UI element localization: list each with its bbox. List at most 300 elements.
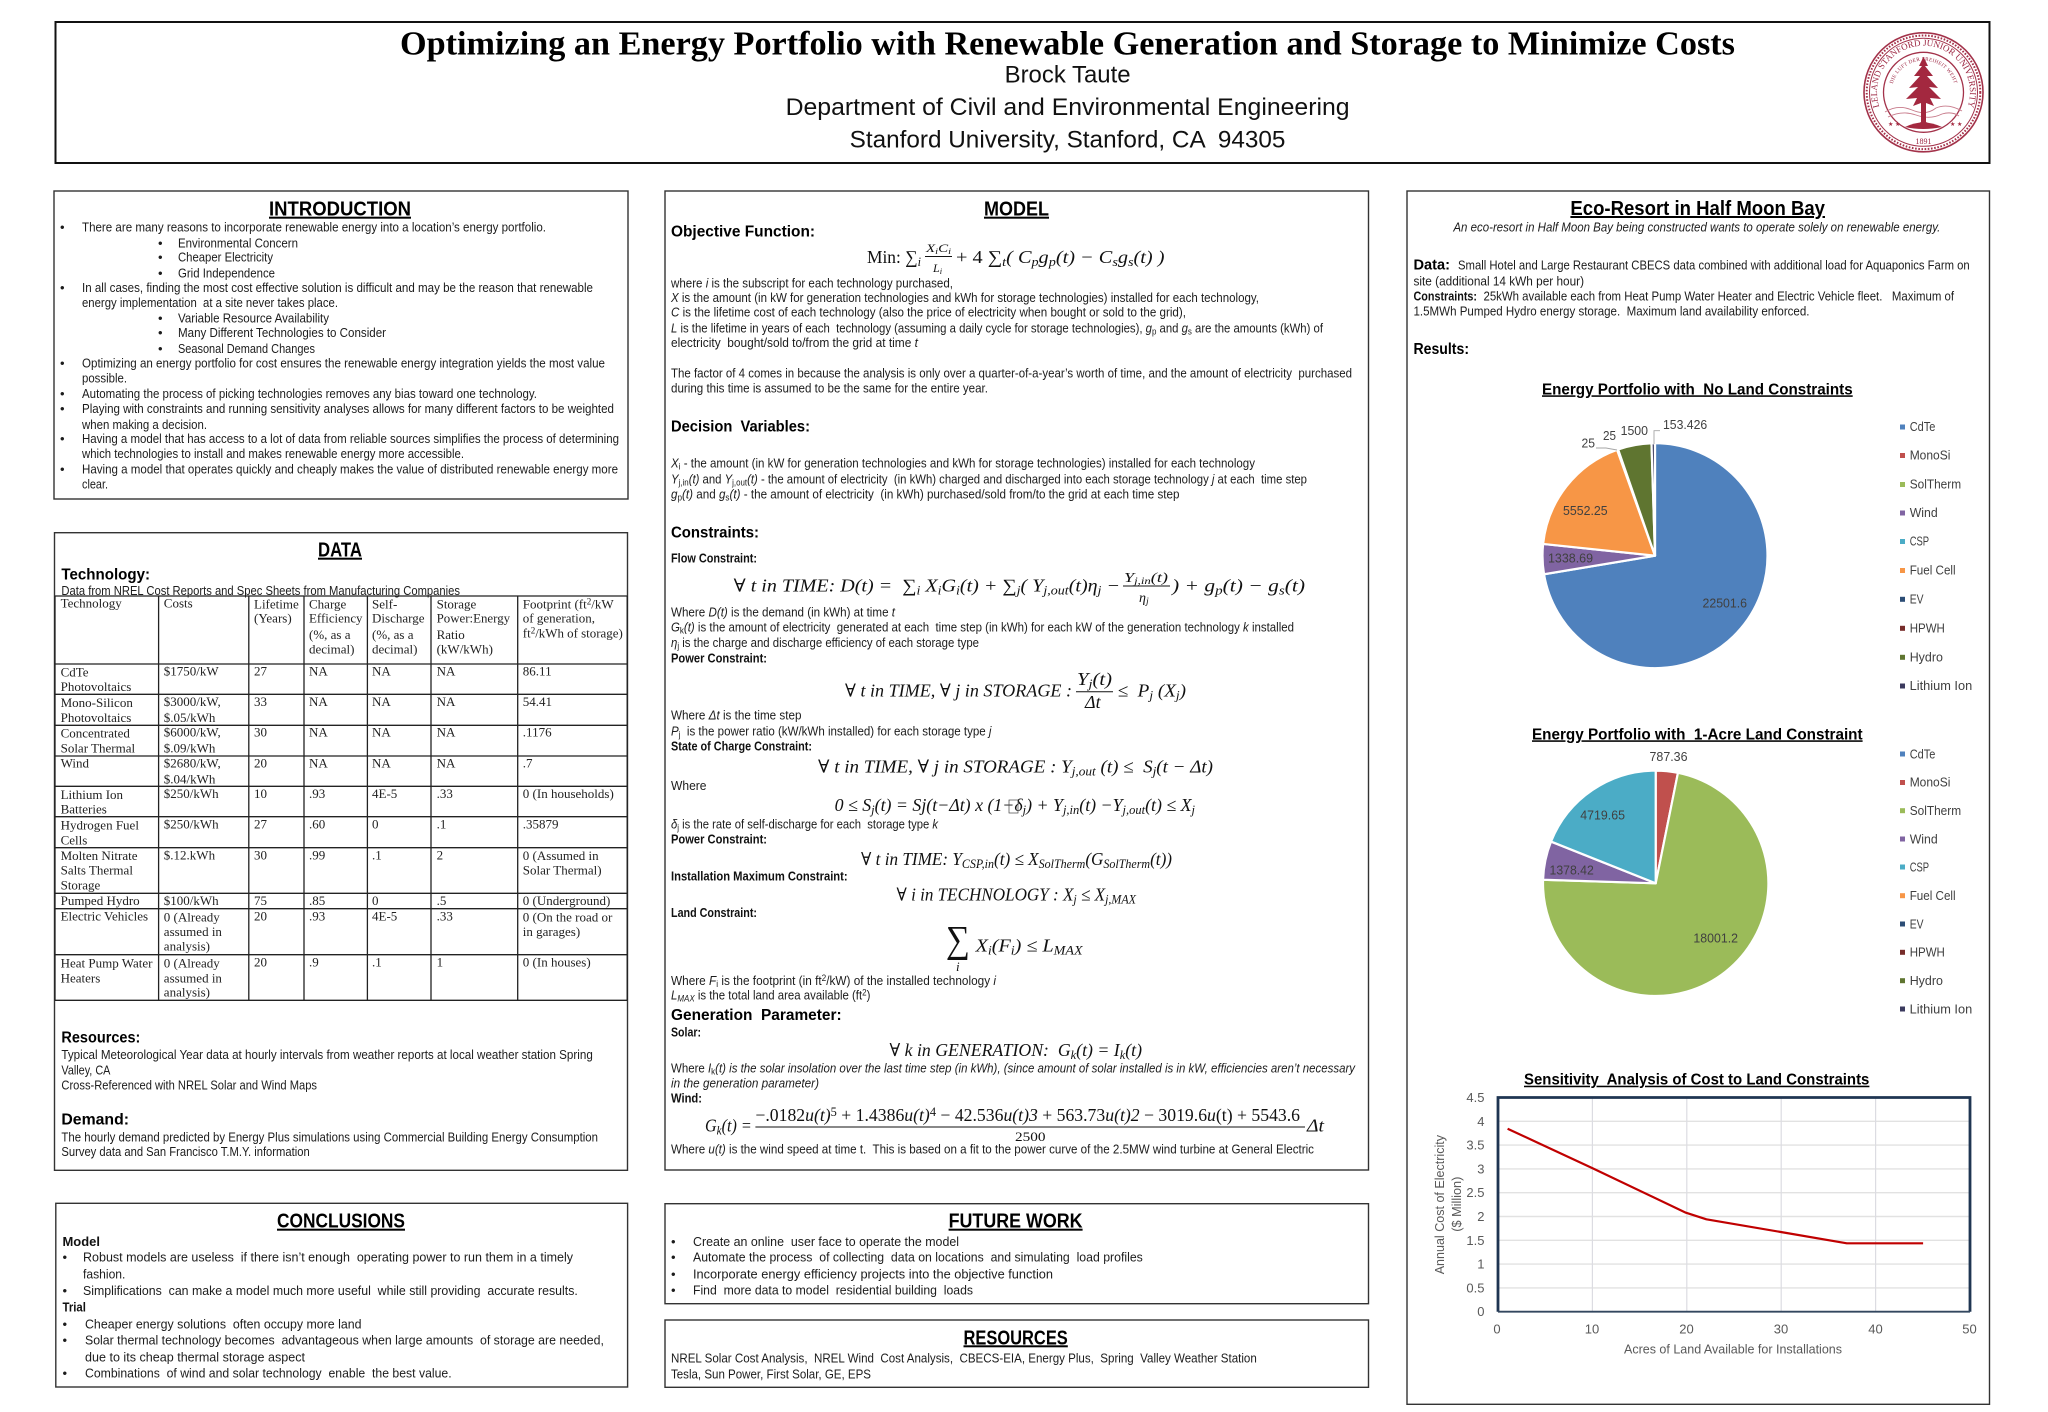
flow constraint: (t)η — [1069, 576, 1098, 597]
trial conclusions list: Solar thermal technology becomes advantageous when large amounts of storage are needed, — [85, 1332, 604, 1347]
flow constraint: ) + g — [1172, 576, 1208, 596]
generation parameter: wind: Wind: — [671, 1091, 702, 1106]
resources text block: Resources: — [61, 1030, 140, 1047]
trial conclusions list: due to its cheap thermal storage aspect — [85, 1349, 305, 1364]
future work bullet list: Find more data to model residential building loads — [693, 1283, 973, 1298]
introduction bullet list: Environmental Concern — [178, 236, 298, 250]
state of charge constraint: (t) ≤ X — [1145, 795, 1193, 816]
technology data table: Storage — [61, 878, 101, 893]
technology data table: 0 (Underground) — [523, 893, 610, 908]
x axis tick labels: 30 — [1774, 1321, 1788, 1336]
x axis tick labels: 20 — [1679, 1321, 1694, 1336]
introduction bullet list: clear. — [82, 477, 108, 492]
resources list: Tesla, Sun Power, First Solar, GE, EPS — [671, 1366, 871, 1381]
state of charge constraint: j,out — [1121, 803, 1146, 817]
technology data table: $1750/kW — [164, 664, 219, 679]
land constraint: ) — [867, 987, 870, 1002]
generation parameter: wind: 5 — [831, 1105, 837, 1119]
flow constraint: s — [1279, 584, 1285, 598]
technology data table: Salts Thermal — [61, 863, 133, 878]
author and affiliation — [786, 62, 1350, 154]
technology data table: 27 — [254, 664, 268, 679]
introduction bullet list: Automating the process of picking technologies removes any bias toward one technology. — [82, 386, 537, 401]
technology data table: /kW — [591, 596, 614, 611]
introduction bullet list: energy implementation at a site never takes place. — [82, 295, 338, 310]
y axis tick labels: 3 — [1477, 1161, 1484, 1176]
introduction bullet list: There are many reasons to incorporate renewable energy into a location’s energy portfolio. — [82, 220, 546, 235]
introduction bullet list: • — [158, 311, 163, 326]
objective function: Objective Function: — [671, 224, 815, 241]
state of charge constraint: (t) = Sj(t−Δt) x (1−δ — [875, 795, 1023, 816]
technology data table: Photovoltaics — [61, 710, 131, 725]
objective function: g — [1118, 247, 1128, 267]
objective function: (t) ) — [1134, 247, 1165, 268]
technology data table: Heat Pump Water — [61, 955, 153, 970]
state of charge constraint: j — [1151, 764, 1157, 778]
data and constraints description: 1.5MWh Pumped Hydro energy storage. Maximum land availability enforced. — [1414, 304, 1810, 319]
technology data table: 0 (Already — [164, 909, 220, 924]
trial conclusions list: Cheaper energy solutions often occupy more land — [85, 1316, 362, 1331]
technology data table: Solar Thermal — [61, 740, 135, 755]
legend — [1900, 747, 1972, 1016]
generation parameter: solar: k — [1071, 1048, 1077, 1062]
objective function: ( C — [1006, 247, 1033, 268]
x axis title: Acres of Land Available for Installations — [1624, 1341, 1842, 1356]
technology data table: 0 (In households) — [523, 786, 614, 801]
land constraint: i — [956, 959, 960, 974]
legend: HPWH — [1910, 621, 1945, 635]
flow constraint: j,out — [1041, 584, 1069, 598]
flow constraint: (t) + ∑ — [960, 576, 1017, 597]
land constraint: ) ≤ L — [1014, 936, 1054, 957]
technology data table: .1176 — [523, 725, 552, 740]
heading: model: MODEL — [984, 199, 1049, 221]
model conclusions list: Model — [62, 1234, 100, 1249]
flow constraint: is the amount of electricity generated at each time step (in kWh) for each kW of the generation technology k installed — [698, 620, 1313, 635]
technology data table: .33 — [437, 786, 453, 801]
technology data table: .93 — [309, 786, 325, 801]
flow constraint: p — [1214, 584, 1223, 598]
technology data table: .1 — [372, 847, 382, 862]
decision variables: j,in — [678, 477, 689, 487]
technology data table: 1 — [437, 954, 443, 969]
technology data table: 0 (Assumed in — [523, 848, 599, 863]
technology data table: NA — [309, 694, 328, 709]
future work bullet list: Automate the process of collecting data on locations and simulating load profiles — [693, 1250, 1143, 1265]
flow constraint: η — [1139, 591, 1146, 606]
decision variables: g — [671, 486, 678, 501]
technology data table: /kWh of storage) — [535, 626, 623, 640]
chart title: Energy Portfolio with No Land Constraints — [1542, 381, 1853, 398]
resources text block: Cross-Referenced with NREL Solar and Wind Maps — [61, 1077, 317, 1092]
technology data table: Power:Energy — [437, 611, 511, 626]
generation parameter: wind: Where u(t) is the wind speed at time t. This is based on a fit to the power curve of the 2.5MW wind turbine at General Electric — [671, 1141, 1314, 1156]
legend: EV — [1910, 917, 1924, 931]
objective function definitions: are the amounts (kWh) of — [1192, 320, 1323, 335]
flow constraint: Where D(t) is the demand (in kWh) at time t — [671, 605, 896, 620]
technology data table: NA — [309, 664, 328, 679]
state of charge constraint: ) + Y — [1025, 795, 1065, 816]
generation parameter: solar: Generation Parameter: — [671, 1007, 842, 1024]
heading: data: DATA — [318, 540, 362, 562]
author and affiliation: Department of Civil and Environmental Engineering — [786, 94, 1350, 121]
land constraint: L — [671, 987, 677, 1002]
technology data table: $2680/kW, — [164, 755, 221, 770]
CSP power constraint: Power Constraint: — [671, 831, 767, 846]
generation parameter: wind — [671, 1091, 1325, 1156]
introduction bullet list: Grid Independence — [178, 265, 275, 280]
objective function: X — [926, 241, 933, 255]
generation parameter: wind: u(t)3 + 563.73u(t)2 − 3019.6u(t) + 5543.6 — [1003, 1105, 1302, 1125]
introduction bullet list: Playing with constraints and running sensitivity analyses allows for many different factors to be weighted — [82, 401, 614, 416]
objective function: L — [933, 261, 940, 275]
pie chart: energy portfolio with no land constraints: 25 — [1582, 437, 1595, 451]
model conclusions list — [62, 1234, 578, 1298]
heading: conclusions: CONCLUSIONS — [277, 1211, 405, 1233]
technology data table: $.04/kWh — [164, 771, 216, 786]
installation maximum constraint: ∀ i in TECHNOLOGY : X — [896, 885, 1083, 905]
introduction bullet list: • — [158, 250, 163, 265]
legend: CSP — [1910, 535, 1929, 549]
technology data table: NA — [372, 755, 391, 770]
installation maximum constraint: j — [1072, 893, 1077, 907]
technology data table: ft — [523, 626, 531, 640]
technology data table: CdTe — [61, 665, 89, 680]
technology data table: 0 — [372, 893, 378, 908]
decision variables — [670, 419, 1307, 502]
technology data table: 30 — [254, 725, 267, 740]
land constraint: ∑ — [946, 919, 970, 961]
pie chart: energy portfolio with no land constraints: 153.426 — [1663, 418, 1707, 432]
state of charge constraint: (t) −Y — [1079, 795, 1124, 816]
generation parameter: solar: ∀ k in GENERATION: G — [890, 1040, 1073, 1060]
data and constraints description: Small Hotel and Large Restaurant CBECS data combined with additional load for Aquaponics Farm on — [1458, 257, 1970, 272]
legend: Lithium Ion — [1910, 1002, 1972, 1016]
objective function: t — [1002, 255, 1007, 269]
flow constraint: ( Y — [1021, 576, 1046, 597]
technology data table: 54.41 — [523, 694, 552, 709]
objective function: s — [1128, 255, 1134, 269]
pie chart: energy portfolio with no land constraints: 1500 — [1621, 424, 1648, 438]
legend: Hydro — [1910, 650, 1943, 664]
header panel — [54, 21, 1990, 164]
flow constraint: (t) — [684, 620, 695, 635]
flow constraint: k — [680, 626, 684, 636]
land constraint: i — [993, 973, 997, 988]
introduction bullet list: • — [60, 220, 65, 235]
introduction bullet list — [60, 220, 619, 492]
power constraint: P — [671, 724, 679, 739]
land constraint: is the total land area available (ft — [695, 987, 862, 1002]
objective function: + 4 ∑ — [956, 247, 1002, 267]
technology data table: assumed in — [164, 970, 222, 985]
decision variables: - the amount of electricity (in kWh) charged and discharged into each storage technology j at each time step — [761, 471, 1321, 486]
generation parameter: solar: k — [711, 1067, 716, 1077]
panel: eco-resort results — [1407, 191, 1990, 1404]
demand text block: The hourly demand predicted by Energy Plus simulations using Commercial Building Energy Consumption — [61, 1130, 598, 1145]
technology data table: .60 — [309, 817, 325, 832]
y axis tick labels: 2 — [1477, 1209, 1484, 1224]
land constraint: (F — [992, 936, 1012, 957]
x axis tick labels: 10 — [1585, 1321, 1599, 1336]
introduction bullet list: Seasonal Demand Changes — [178, 341, 315, 356]
demand text block: Demand: — [61, 1111, 129, 1128]
introduction bullet list: • — [60, 280, 65, 295]
land constraint: MAX — [677, 993, 695, 1003]
technology data table: Discharge — [372, 611, 425, 626]
technology data table: Cells — [61, 832, 87, 847]
objective function: (t) − C — [1056, 247, 1113, 268]
power constraint: (t) — [1093, 669, 1112, 690]
technology data table: 20 — [254, 908, 267, 923]
x axis tick labels: 50 — [1962, 1321, 1977, 1336]
icon: Stanford University seal: ★ ★ — [1888, 121, 1900, 128]
technology data table: analysis) — [164, 985, 210, 1000]
objective function definitions: X is the amount (in kW for generation technologies and kWh for storage technologies) installed for each technology, — [670, 290, 1259, 305]
technology data table: NA — [372, 725, 391, 740]
objective function: g — [1039, 247, 1049, 267]
panel: model — [665, 191, 1368, 1170]
model conclusions list: Simplifications can make a model much more useful while still providing accurate results. — [83, 1283, 578, 1298]
decision variables: - the amount (in kW for generation technologies and kWh for storage technologies) installed for each technology — [680, 455, 1255, 470]
heading: eco-resort: Eco-Resort in Half Moon Bay — [1570, 198, 1826, 220]
technology data table: $6000/kW, — [164, 725, 221, 740]
objective function definitions: L is the lifetime in years of each technology (assuming a daily cycle for storage technologies), g — [671, 320, 1211, 335]
power constraint: j — [678, 730, 680, 740]
technology data table: $250/kWh — [164, 786, 219, 801]
technology data table: analysis) — [164, 939, 210, 954]
technology data table: Technology — [61, 596, 122, 611]
decision variables: - the amount of electricity (in kWh) purchased/sold from/to the grid at each time step — [744, 486, 1230, 501]
data and constraints description: Constraints: — [1414, 289, 1477, 304]
technology data table: Lifetime — [254, 596, 299, 611]
flow constraint: i — [917, 584, 921, 598]
flow constraint: j — [1144, 596, 1149, 607]
technology data table: 20 — [254, 755, 267, 770]
technology data table: NA — [437, 694, 456, 709]
objective function: Min: ∑ — [867, 247, 918, 267]
decision variables: (t) — [747, 471, 758, 486]
technology subheading — [61, 566, 460, 598]
technology data table: .33 — [437, 908, 453, 923]
legend: Fuel Cell — [1910, 889, 1956, 903]
y axis tick labels: 4.5 — [1466, 1090, 1484, 1105]
introduction bullet list: when making a decision. — [81, 417, 207, 432]
legend: Fuel Cell — [1910, 564, 1956, 578]
decision variables: (t) — [689, 471, 699, 486]
model conclusions list: • — [62, 1283, 68, 1298]
y axis tick labels: 1 — [1477, 1257, 1484, 1272]
technology data table: Concentrated — [61, 726, 130, 741]
technology data table: Self- — [372, 596, 397, 611]
flow constraint: Y — [1124, 571, 1132, 586]
introduction bullet list: Cheaper Electricity — [178, 250, 273, 265]
objective function: i — [948, 247, 952, 256]
model conclusions list: • — [62, 1250, 68, 1265]
objective function definitions: during this time is assumed to be the same for the entire year. — [671, 380, 988, 395]
y axis tick labels: 0 — [1477, 1304, 1484, 1319]
technology data table: 75 — [254, 893, 267, 908]
y axis tick labels: 4 — [1477, 1114, 1484, 1129]
technology data table: 2 — [531, 626, 536, 636]
state of charge constraint: (t − Δt) — [1156, 756, 1213, 777]
introduction bullet list: • — [60, 401, 65, 416]
state of charge constraint: j,in — [1061, 803, 1079, 817]
technology data table: Mono-Silicon — [61, 695, 133, 710]
future work bullet list: • — [671, 1266, 676, 1281]
data and constraints description — [1414, 256, 1970, 319]
technology data table: NA — [437, 755, 456, 770]
CSP power constraint: SolTherm — [1103, 857, 1150, 871]
objective function definitions: s — [1188, 326, 1192, 336]
state of charge constraint: State of Charge Constraint: — [671, 739, 812, 754]
panel: data — [54, 533, 628, 1170]
author and affiliation: Brock Taute — [1005, 62, 1131, 89]
CSP power constraint: (t) ≤ X — [994, 849, 1040, 870]
future work bullet list: • — [671, 1283, 676, 1298]
power constraint: ∀ t in TIME, ∀ j in STORAGE : — [845, 681, 1072, 701]
trial conclusions list: Combinations of wind and solar technology enable the best value. — [85, 1365, 452, 1380]
data and constraints description: Data: — [1414, 256, 1450, 273]
flow constraint: Flow Constraint: — [671, 551, 757, 566]
model conclusions list: Robust models are useless if there isn’t enough operating power to run them in a timely — [83, 1250, 573, 1265]
pie chart: energy portfolio with no land constraints — [1542, 381, 1972, 693]
objective function definitions: g — [1182, 320, 1189, 335]
technology data table: 0 (On the road or — [523, 909, 613, 924]
legend: Lithium Ion — [1910, 679, 1972, 693]
technology data table: 4E-5 — [372, 786, 397, 801]
technology data table: of generation, — [523, 611, 595, 626]
generation parameter: solar: k — [1120, 1048, 1126, 1062]
power constraint — [671, 651, 1186, 740]
future work bullet list: • — [671, 1250, 676, 1265]
pie chart: energy portfolio with no land constraints: 5552.25 — [1563, 504, 1608, 518]
technology data table: NA — [372, 694, 391, 709]
CSP power constraint — [671, 831, 1172, 871]
land constraint: 2 — [862, 987, 867, 997]
technology data table: NA — [309, 755, 328, 770]
legend: CdTe — [1910, 747, 1935, 761]
flow constraint: (t) — [1285, 576, 1305, 597]
land constraint: /kW) of the installed technology — [826, 973, 993, 988]
power constraint: (X — [1153, 681, 1177, 702]
introduction bullet list: Having a model that has access to a lot of data from reliable sources simplifies the process of determining — [82, 431, 619, 446]
technology data table: Footprint (ft — [523, 596, 587, 611]
trial conclusions list — [62, 1300, 604, 1380]
decision variables: Decision Variables: — [671, 419, 810, 436]
legend: MonoSi — [1910, 449, 1950, 463]
future work bullet list: • — [671, 1234, 676, 1249]
technology data table: Molten Nitrate — [61, 848, 138, 863]
technology data table: decimal) — [309, 641, 354, 656]
land constraint: i — [988, 944, 992, 958]
model conclusions list: fashion. — [83, 1266, 125, 1281]
technology data table: .7 — [523, 755, 533, 770]
objective function definitions: p — [1152, 326, 1156, 336]
power constraint: Δt — [1084, 692, 1102, 712]
CSP power constraint: ∀ t in TIME: Y — [861, 849, 967, 869]
state of charge constraint: δ — [671, 817, 678, 832]
state of charge constraint — [671, 739, 1213, 833]
technology data table: .5 — [437, 893, 446, 908]
objective function: i — [940, 267, 943, 276]
legend: CdTe — [1910, 420, 1935, 434]
state of charge constraint: j — [869, 803, 875, 817]
introduction bullet list: Many Different Technologies to Consider — [178, 325, 387, 340]
decision variables: X — [670, 455, 680, 470]
resources text block — [61, 1030, 593, 1092]
introduction bullet list: • — [158, 325, 163, 340]
objective function: p — [1030, 255, 1039, 269]
heading: resources: RESOURCES — [964, 1327, 1068, 1349]
technology data table: NA — [437, 664, 456, 679]
pie chart: energy portfolio with no land constraints: 25 — [1603, 429, 1616, 443]
x axis tick labels — [1493, 1321, 1977, 1336]
flow constraint: j — [676, 641, 679, 651]
technology data table: Lithium Ion — [61, 787, 124, 802]
icon: Stanford University seal: LELAND STANFORD JUNIOR UNIVERSITY — [1871, 40, 1976, 108]
demand text block: Survey data and San Francisco T.M.Y. information — [61, 1144, 310, 1159]
objective function: s — [1112, 255, 1118, 269]
technology data table: .99 — [309, 847, 325, 862]
introduction bullet list: • — [158, 265, 163, 280]
title: Optimizing an Energy Portfolio with Renewable Generation and Storage to Minimize Costs — [400, 26, 1735, 62]
objective function: i — [935, 247, 939, 256]
state of charge constraint: j,out — [1070, 764, 1096, 778]
state of charge constraint: (t) ≤ S — [1096, 756, 1153, 777]
state of charge constraint: ∀ t in TIME, ∀ j in STORAGE : Y — [818, 756, 1058, 776]
generation parameter: wind: G — [705, 1116, 718, 1136]
installation maximum constraint: Installation Maximum Constraint: — [671, 869, 848, 884]
pie chart: energy portfolio with 1-acre land constraint: 4719.65 — [1580, 808, 1625, 822]
land constraint: is the footprint (in ft — [718, 973, 822, 988]
CSP power constraint: (G — [1085, 849, 1103, 870]
state of charge constraint: 0 ≤ S — [835, 795, 871, 815]
objective function: i — [918, 255, 921, 269]
technology data table: Charge — [309, 596, 347, 611]
icon: Stanford University seal: 1891 — [1916, 137, 1932, 146]
objective function definitions — [670, 275, 1352, 395]
chart title: Sensitivity Analysis of Cost to Land Constraints — [1524, 1072, 1869, 1089]
line chart: sensitivity analysis of cost to land constraints — [1432, 1072, 1977, 1356]
eco-resort description: An eco-resort in Half Moon Bay being constructed wants to operate solely on renewable energy. — [1453, 220, 1940, 235]
technology subheading: Technology: — [61, 566, 150, 583]
flow constraint: j — [1095, 584, 1102, 598]
x axis tick labels: 0 — [1493, 1321, 1501, 1336]
technology data table: Ratio — [437, 627, 465, 642]
technology data table: decimal) — [372, 641, 417, 656]
data and constraints description: site (additional 14 kWh per hour) — [1414, 273, 1584, 288]
objective function definitions: C is the lifetime cost of each technology (also the price of electricity when bought or sold to the grid), — [671, 305, 1186, 320]
technology data table — [55, 596, 627, 1000]
generation parameter: solar: Where I — [671, 1061, 712, 1076]
objective function definitions: where i is the subscript for each technology purchased, — [670, 275, 953, 290]
generation parameter: solar — [671, 1007, 1356, 1091]
state of charge constraint: k — [932, 817, 939, 832]
technology data table: $.12.kWh — [164, 847, 216, 862]
legend: EV — [1910, 592, 1924, 606]
legend — [1900, 420, 1972, 693]
power constraint: Where Δt is the time step — [671, 708, 802, 723]
legend: Wind — [1910, 832, 1938, 846]
technology data table: $3000/kW, — [164, 694, 221, 709]
state of charge constraint: is the rate of self-discharge for each storage type — [679, 817, 932, 832]
flow constraint: G — [942, 576, 956, 596]
pie chart: energy portfolio with no land constraints: 22501.6 — [1702, 597, 1747, 611]
panel: introduction — [54, 191, 628, 499]
legend: SolTherm — [1910, 478, 1961, 492]
technology data table: $250/kWh — [164, 817, 219, 832]
